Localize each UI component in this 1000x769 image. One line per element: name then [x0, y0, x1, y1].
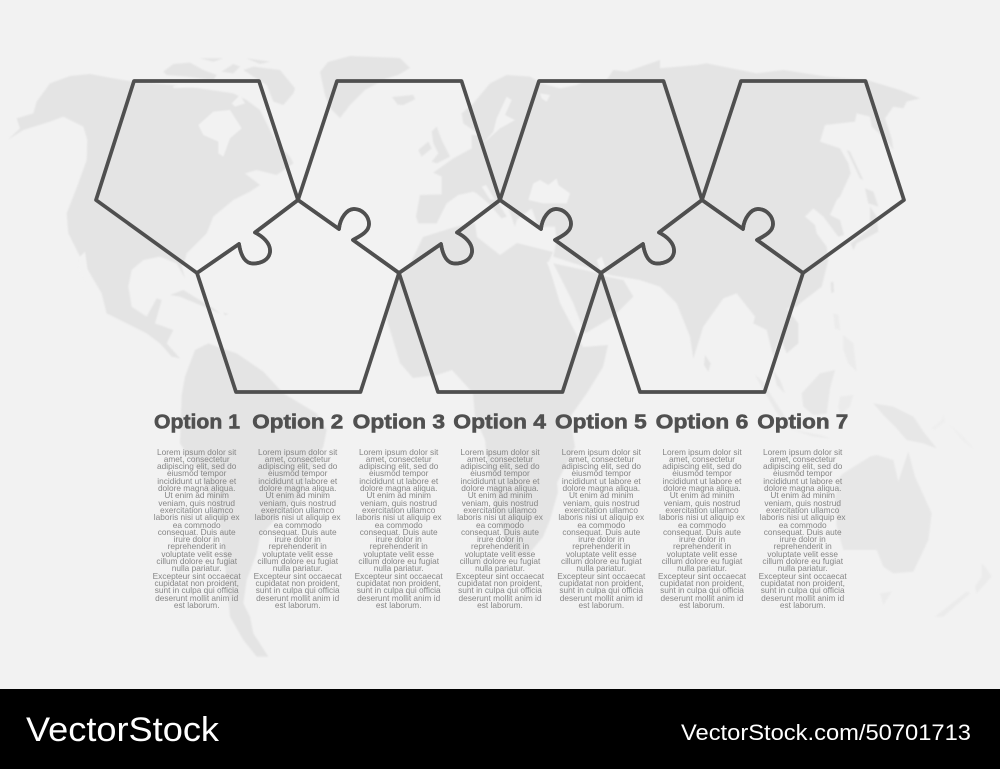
text block: option 4: Lorem ipsum dolor sit	[460, 447, 540, 457]
text block: option 4: reprehenderit in	[471, 541, 529, 551]
text block: option 5: cupidatat non proident,	[559, 578, 644, 588]
text block: option 2: cupidatat non proident,	[255, 578, 340, 588]
text block: option 6: veniam, quis nostrud	[664, 498, 740, 508]
text block: option 4: laboris nisi ut aliquip ex	[457, 512, 543, 522]
text block: option 5: Excepteur sint occaecat	[557, 571, 645, 581]
text block: option 4: exercitation ullamco	[463, 505, 537, 515]
text block: option 4	[456, 447, 544, 610]
text block: option 3	[355, 447, 443, 610]
text block: option 6: irure dolor in	[679, 534, 725, 544]
text block: option 3: cupidatat non proident,	[356, 578, 441, 588]
heading: option 2: Option 2	[252, 412, 343, 434]
text block: option 3: reprehenderit in	[370, 541, 428, 551]
text block: option 6: cillum dolore eu fugiat	[662, 556, 742, 566]
text block: option 3: veniam, quis nostrud	[360, 498, 437, 508]
text block: option 6: reprehenderit in	[673, 541, 731, 551]
text block: option 2: laboris nisi ut aliquip ex	[255, 512, 341, 522]
text block: option 5: amet, consectetur	[568, 454, 634, 464]
text block: option 5: irure dolor in	[578, 534, 624, 544]
text block: option 5: consequat. Duis aute	[562, 527, 640, 537]
text block: option 1: eiusmod tempor	[167, 468, 226, 478]
text block: option 5: eiusmod tempor	[572, 468, 631, 478]
text block: option 6: ea commodo	[678, 520, 726, 530]
text block: option 2: cillum dolore eu fugiat	[257, 556, 338, 566]
text block: option 1: deserunt mollit anim id	[155, 593, 238, 603]
text block: option 4: incididunt ut labore et	[461, 476, 539, 486]
text block: option 6	[658, 447, 746, 610]
text block: option 7: Ut enim ad minim	[770, 490, 835, 500]
text block: option 2: deserunt mollit anim id	[256, 593, 339, 603]
text block: option 6: sunt in culpa qui officia	[660, 585, 744, 595]
heading: option 5: Option 5	[555, 412, 647, 434]
text block: option 1: sunt in culpa qui officia	[155, 585, 239, 595]
text block: option 1: cillum dolore eu fugiat	[156, 556, 237, 566]
text block: option 3: voluptate velit esse	[363, 549, 434, 559]
text block: option 2: voluptate velit esse	[262, 549, 333, 559]
brand name: VectorStock	[26, 711, 220, 749]
text block: option 3: deserunt mollit anim id	[357, 593, 440, 603]
text block: option 6: dolore magna aliqua.	[663, 483, 741, 493]
text block: option 7: ea commodo	[779, 520, 827, 530]
text block: option 7: adipiscing elit, sed do	[763, 461, 842, 471]
heading: option 7: Option 7	[757, 412, 848, 434]
text block: option 1: voluptate velit esse	[161, 549, 232, 559]
text block: option 5: reprehenderit in	[572, 541, 630, 551]
text block: option 1: reprehenderit in	[168, 541, 226, 551]
text block: option 5: exercitation ullamco	[565, 505, 638, 515]
text block: option 6: voluptate velit esse	[667, 549, 737, 559]
pentagon: option 4	[399, 200, 601, 392]
text block: option 4: sunt in culpa qui officia	[458, 585, 542, 595]
text block: option 7: laboris nisi ut aliquip ex	[760, 512, 846, 522]
text block: option 1: incididunt ut labore et	[157, 476, 236, 486]
text block: option 1: Excepteur sint occaecat	[153, 571, 241, 581]
text block: option 1: dolore magna aliqua.	[158, 483, 235, 493]
text block: option 1: ea commodo	[173, 520, 221, 530]
text block: option 7: eiusmod tempor	[773, 468, 832, 478]
text block: option 7: Excepteur sint occaecat	[759, 571, 847, 581]
text block: option 3: exercitation ullamco	[362, 505, 435, 515]
text block: option 2: dolore magna aliqua.	[259, 483, 336, 493]
text block: option 2: incididunt ut labore et	[258, 476, 337, 486]
text block: option 7: Lorem ipsum dolor sit	[763, 447, 842, 457]
text block: option 7: dolore magna aliqua.	[764, 483, 841, 493]
text block: option 2: consequat. Duis aute	[259, 527, 337, 537]
text block: option 4: voluptate velit esse	[465, 549, 535, 559]
text block: option 3: sunt in culpa qui officia	[357, 585, 441, 595]
text block: option 3: consequat. Duis aute	[360, 527, 438, 537]
text block: option 7	[759, 447, 847, 610]
text block: option 5: ea commodo	[577, 520, 625, 530]
text block: option 3: nulla pariatur.	[374, 563, 424, 573]
text block: option 2: irure dolor in	[275, 534, 321, 544]
text block: option 6: consequat. Duis aute	[663, 527, 741, 537]
heading: option 1: Option 1	[154, 412, 240, 434]
text block: option 6: nulla pariatur.	[677, 563, 727, 573]
text block: option 6: Excepteur sint occaecat	[658, 571, 746, 581]
text block: option 3: dolore magna aliqua.	[360, 483, 437, 493]
text block: option 7: incididunt ut labore et	[763, 476, 842, 486]
text block: option 2: ea commodo	[274, 520, 322, 530]
text block: option 4: dolore magna aliqua.	[461, 483, 539, 493]
text block: option 1: Lorem ipsum dolor sit	[157, 447, 236, 457]
text block: option 4: irure dolor in	[477, 534, 523, 544]
text block: option 2: Excepteur sint occaecat	[254, 571, 342, 581]
heading: option 4: Option 4	[453, 412, 547, 434]
text block: option 5: adipiscing elit, sed do	[562, 461, 641, 471]
text block: option 7: reprehenderit in	[774, 541, 832, 551]
text block: option 3: ea commodo	[375, 520, 423, 530]
text block: option 4: cupidatat non proident,	[458, 578, 542, 588]
text block: option 1: exercitation ullamco	[160, 505, 233, 515]
pentagon: option 5	[500, 81, 702, 273]
text block: option 7: est laborum.	[780, 600, 826, 610]
text block: option 2: sunt in culpa qui officia	[256, 585, 340, 595]
text block: option 4: cillum dolore eu fugiat	[460, 556, 540, 566]
text block: option 4: Excepteur sint occaecat	[456, 571, 544, 581]
text block: option 1: est laborum.	[174, 600, 220, 610]
text block: option 6: deserunt mollit anim id	[660, 593, 744, 603]
text block: option 2: reprehenderit in	[269, 541, 327, 551]
text block: option 3: Excepteur sint occaecat	[355, 571, 443, 581]
text block: option 6: Lorem ipsum dolor sit	[662, 447, 742, 457]
text block: option 3: eiusmod tempor	[369, 468, 428, 478]
pentagon: option 2	[197, 200, 399, 392]
text block: option 2: exercitation ullamco	[261, 505, 334, 515]
text block: option 7: nulla pariatur.	[778, 563, 828, 573]
text block: option 1: irure dolor in	[174, 534, 220, 544]
text block: option 6: amet, consectetur	[669, 454, 735, 464]
text block: option 6: incididunt ut labore et	[663, 476, 741, 486]
text block: option 1: veniam, quis nostrud	[158, 498, 235, 508]
text block: option 3: cillum dolore eu fugiat	[358, 556, 439, 566]
text block: option 5: voluptate velit esse	[566, 549, 637, 559]
text block: option 5: cillum dolore eu fugiat	[561, 556, 642, 566]
text block: option 5: Ut enim ad minim	[569, 490, 634, 500]
text block: option 2: amet, consectetur	[265, 454, 331, 464]
text block: option 2: Lorem ipsum dolor sit	[258, 447, 337, 457]
text block: option 4: veniam, quis nostrud	[462, 498, 538, 508]
text block: option 4: eiusmod tempor	[470, 468, 530, 478]
text block: option 6: eiusmod tempor	[672, 468, 732, 478]
text block: option 1: adipiscing elit, sed do	[157, 461, 236, 471]
text block: option 7: cillum dolore eu fugiat	[762, 556, 843, 566]
text block: option 4: amet, consectetur	[467, 454, 533, 464]
text block: option 1: cupidatat non proident,	[154, 578, 239, 588]
text block: option 7: amet, consectetur	[770, 454, 836, 464]
text block: option 5: est laborum.	[578, 600, 624, 610]
text block: option 2: veniam, quis nostrud	[259, 498, 336, 508]
text block: option 1: nulla pariatur.	[172, 563, 222, 573]
text block: option 3: amet, consectetur	[366, 454, 432, 464]
text block: option 5: incididunt ut labore et	[562, 476, 641, 486]
text block: option 7: sunt in culpa qui officia	[761, 585, 845, 595]
text block: option 2: est laborum.	[275, 600, 321, 610]
heading: option 3: Option 3	[353, 412, 445, 434]
text block: option 1: amet, consectetur	[164, 454, 230, 464]
text block: option 4: consequat. Duis aute	[461, 527, 539, 537]
text block: option 6: exercitation ullamco	[665, 505, 739, 515]
text block: option 4: est laborum.	[477, 600, 523, 610]
text block: option 3: incididunt ut labore et	[359, 476, 438, 486]
pentagon: option 6	[601, 200, 803, 392]
text block: option 1: laboris nisi ut aliquip ex	[154, 512, 240, 522]
text block: option 2: nulla pariatur.	[273, 563, 323, 573]
text block: option 6: est laborum.	[679, 600, 725, 610]
text block: option 6: adipiscing elit, sed do	[662, 461, 742, 471]
text block: option 4: deserunt mollit anim id	[458, 593, 542, 603]
text block: option 1	[153, 447, 241, 610]
text block: option 6: laboris nisi ut aliquip ex	[659, 512, 745, 522]
text block: option 5: dolore magna aliqua.	[563, 483, 640, 493]
text block: option 3: Ut enim ad minim	[366, 490, 431, 500]
heading: option 6: Option 6	[656, 412, 748, 434]
image reference url: VectorStock.com/50701713	[681, 720, 971, 745]
text block: option 3: adipiscing elit, sed do	[359, 461, 438, 471]
text block: option 4: Ut enim ad minim	[468, 490, 532, 500]
text block: option 1: consequat. Duis aute	[158, 527, 236, 537]
text block: option 1: Ut enim ad minim	[164, 490, 229, 500]
text block: option 7: irure dolor in	[780, 534, 826, 544]
text block: option 7: voluptate velit esse	[767, 549, 838, 559]
text block: option 7: exercitation ullamco	[766, 505, 839, 515]
text block: option 3: est laborum.	[376, 600, 422, 610]
text block: option 5: laboris nisi ut aliquip ex	[558, 512, 644, 522]
text block: option 3: irure dolor in	[376, 534, 422, 544]
text block: option 2: eiusmod tempor	[268, 468, 327, 478]
text block: option 7: consequat. Duis aute	[764, 527, 842, 537]
pentagon: option 7	[702, 81, 904, 273]
text block: option 5: veniam, quis nostrud	[563, 498, 640, 508]
text block: option 2: Ut enim ad minim	[265, 490, 330, 500]
pentagon: option 3	[298, 81, 500, 273]
text block: option 2: adipiscing elit, sed do	[258, 461, 337, 471]
text block: option 7: cupidatat non proident,	[760, 578, 845, 588]
text block: option 5: sunt in culpa qui officia	[559, 585, 643, 595]
text block: option 4: nulla pariatur.	[475, 563, 525, 573]
text block: option 4: adipiscing elit, sed do	[460, 461, 540, 471]
text block: option 3: Lorem ipsum dolor sit	[359, 447, 438, 457]
text block: option 5: deserunt mollit anim id	[560, 593, 643, 603]
text block: option 6: Ut enim ad minim	[670, 490, 734, 500]
text block: option 2	[254, 447, 342, 610]
text block: option 4: ea commodo	[476, 520, 524, 530]
text block: option 5	[557, 447, 646, 610]
text block: option 6: cupidatat non proident,	[660, 578, 744, 588]
text block: option 7: deserunt mollit anim id	[761, 593, 844, 603]
text block: option 3: laboris nisi ut aliquip ex	[356, 512, 442, 522]
pentagon: option 1	[96, 81, 298, 273]
text block: option 7: veniam, quis nostrud	[764, 498, 841, 508]
text block: option 5: nulla pariatur.	[576, 563, 626, 573]
text block: option 5: Lorem ipsum dolor sit	[562, 447, 641, 457]
